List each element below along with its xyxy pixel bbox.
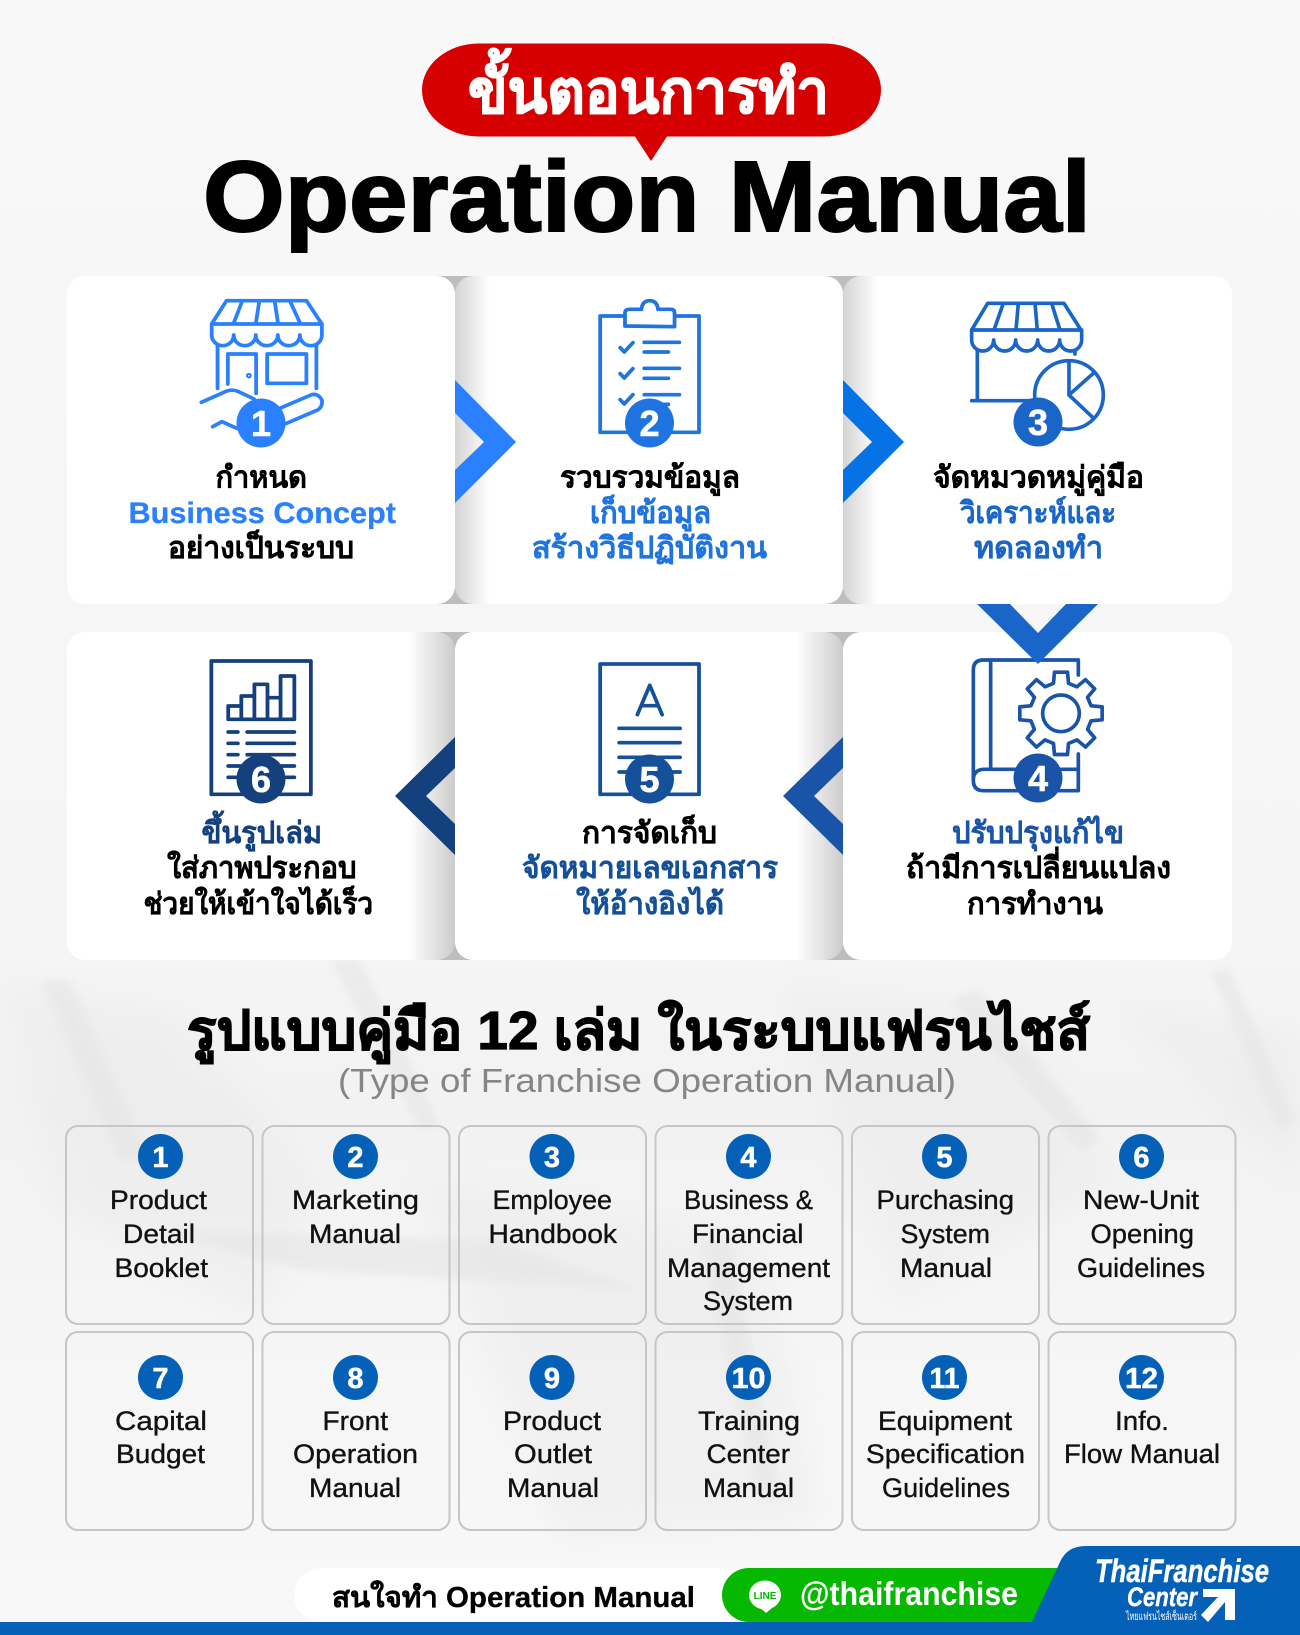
manual 1: Booklet	[114, 1253, 209, 1283]
manual 4: 4	[740, 1142, 757, 1174]
manual 6	[1048, 1126, 1236, 1324]
step 3 text: ทดลองทำ	[974, 532, 1103, 565]
manual 9: Outlet	[514, 1439, 593, 1469]
manual 1	[66, 1126, 253, 1324]
manual 12	[1048, 1332, 1236, 1530]
step 4 text	[906, 815, 1171, 921]
manual 10	[656, 1332, 842, 1530]
step 1 text: อย่างเป็นระบบ	[168, 529, 354, 565]
step 4 card	[843, 632, 1232, 960]
step 6 text: ขึ้นรูปเล่ม	[202, 810, 322, 852]
step 2 text	[532, 462, 767, 565]
line contact pill: @thaifranchise	[800, 1575, 1018, 1612]
manual 7: 7	[152, 1363, 169, 1395]
manual 8	[262, 1332, 450, 1530]
step 6 text: ใส่ภาพประกอบ	[167, 850, 356, 885]
line contact pill	[722, 1568, 1062, 1622]
manual 12: Info.	[1115, 1406, 1169, 1436]
step 5 text: การจัดเก็บ	[582, 814, 717, 850]
step number 2	[625, 398, 674, 448]
manual 7: Budget	[116, 1439, 206, 1469]
manual 5: System	[900, 1219, 990, 1249]
step 4 text: ปรับปรุงแก้ไข	[952, 815, 1124, 852]
panel: manual types grid	[66, 1126, 1236, 1530]
step 3 card	[843, 276, 1232, 604]
manual 8: Manual	[309, 1473, 401, 1503]
manual 10: Training	[698, 1406, 800, 1436]
step 3 text: จัดหมวดหมู่คู่มือ	[933, 462, 1144, 496]
manual 3: Handbook	[488, 1219, 618, 1249]
manual 2	[262, 1126, 450, 1324]
step number 1: 1	[251, 403, 271, 444]
step 4 text: การทำงาน	[967, 888, 1103, 921]
step number 3	[1014, 398, 1062, 446]
manual 4	[656, 1126, 842, 1324]
icon: checklist clipboard	[600, 301, 699, 432]
step number 2: 2	[639, 403, 660, 444]
manual 11: Equipment	[878, 1406, 1013, 1436]
step number 4: 4	[1028, 758, 1048, 799]
step number 6	[236, 754, 286, 804]
step 2 text: สร้างวิธีปฏิบัติงาน	[532, 532, 767, 565]
step 1 text: Business Concept	[128, 497, 396, 530]
manual 8: 8	[347, 1363, 364, 1395]
step 2 text: รวบรวมข้อมูล	[560, 462, 740, 496]
manual 7: Capital	[115, 1406, 207, 1436]
manual 6: 6	[1133, 1142, 1150, 1174]
manual 11	[852, 1332, 1039, 1530]
logo: ThaiFranchise Center: ไทยแฟรนไชส์เซ็นเตอร์	[1125, 1609, 1197, 1623]
manual 12: Flow Manual	[1064, 1439, 1220, 1469]
section subheading: (Type of Franchise Operation Manual)	[338, 1062, 956, 1099]
icon: LINE	[749, 1580, 781, 1613]
main title: Operation Manual	[203, 141, 1091, 253]
logo: ThaiFranchise Center: Center	[1127, 1582, 1198, 1612]
manual 2: Manual	[309, 1219, 401, 1249]
step 1 text: กำหนด	[216, 462, 307, 494]
arrow: step 2 to 3	[843, 380, 904, 503]
step number 5: 5	[639, 759, 660, 800]
manual 1: 1	[152, 1142, 169, 1174]
icon: logo arrow	[1201, 1589, 1235, 1622]
manual 11: Guidelines	[882, 1473, 1010, 1503]
call to action pill	[294, 1568, 745, 1622]
step 6 card	[67, 632, 455, 960]
step number 6: 6	[251, 759, 271, 800]
step number 4	[1014, 754, 1062, 802]
manual 3	[459, 1126, 646, 1324]
manual 9: Product	[503, 1406, 602, 1436]
manual 2: 2	[347, 1142, 364, 1174]
step 4 text: ถ้ามีการเปลี่ยนแปลง	[906, 846, 1171, 885]
manual 4: Management	[667, 1253, 831, 1283]
manual 4: System	[703, 1286, 793, 1316]
manual 4: Business &	[684, 1185, 813, 1215]
manual 5: 5	[936, 1142, 953, 1174]
manual 5: Manual	[900, 1253, 992, 1283]
manual 8: Front	[322, 1406, 389, 1436]
manual 7	[66, 1332, 253, 1530]
manual 10: Manual	[703, 1473, 794, 1503]
panel: process steps top row	[67, 276, 1232, 604]
arrow: step 5 to 6	[395, 737, 455, 855]
manual 6: Opening	[1090, 1219, 1194, 1249]
step 5 text: ให้อ้างอิงได้	[576, 886, 724, 921]
step 5 card	[455, 632, 843, 960]
manual 8: Operation	[293, 1439, 418, 1469]
step 6 text: ช่วยให้เข้าใจได้เร็ว	[144, 885, 373, 921]
arrow: step 1 to 2	[455, 380, 516, 503]
manual 6: New-Unit	[1083, 1185, 1200, 1215]
step 5 text	[522, 814, 778, 921]
manual 3: 3	[544, 1142, 560, 1174]
section heading: รูปแบบคู่มือ 12 เล่ม ในระบบแฟรนไชส์	[187, 999, 1090, 1064]
manual 2: Marketing	[292, 1185, 419, 1215]
manual 10: Center	[706, 1439, 790, 1469]
manual 6: Guidelines	[1077, 1253, 1205, 1283]
icon: document with letter A	[600, 664, 699, 794]
step number 1	[236, 398, 286, 448]
step 5 text: จัดหมายเลขเอกสาร	[522, 852, 778, 885]
icon: report with bar chart	[211, 661, 311, 794]
manual 11: 11	[930, 1363, 960, 1395]
manual 9	[459, 1332, 646, 1530]
step 2 card	[455, 276, 843, 604]
manual 5	[852, 1126, 1039, 1324]
manual 4: Financial	[692, 1219, 804, 1249]
manual 10: 10	[732, 1363, 766, 1395]
speech bubble title	[422, 44, 881, 161]
manual 12: 12	[1125, 1363, 1158, 1395]
step 6 text	[144, 810, 373, 921]
arrow: step 3 to 4	[977, 604, 1098, 664]
icon: book with gear	[973, 660, 1102, 791]
manual 5: Purchasing	[876, 1185, 1014, 1215]
step 3 text: วิเคราะห์และ	[959, 496, 1116, 530]
manual 9: Manual	[507, 1473, 599, 1503]
manual 1: Product	[110, 1185, 208, 1215]
step number 5	[625, 754, 674, 804]
step 2 text: เก็บข้อมูล	[590, 494, 711, 532]
footer	[0, 1546, 1300, 1635]
arrow: step 4 to 5	[783, 737, 843, 855]
speech bubble title: ขั้นตอนการทำ	[468, 48, 829, 126]
step 1 text	[128, 462, 396, 565]
step 3 text	[933, 462, 1144, 565]
manual 9: 9	[544, 1363, 560, 1395]
step number 3: 3	[1028, 402, 1048, 443]
call to action pill: สนใจทำ Operation Manual	[332, 1580, 695, 1614]
icon: LINE: LINE	[754, 1591, 777, 1602]
step 1 card	[67, 276, 455, 604]
section heading	[187, 999, 1090, 1099]
manual 1: Detail	[123, 1219, 195, 1249]
manual 3: Employee	[492, 1185, 612, 1215]
manual 11: Specification	[866, 1439, 1025, 1469]
icon: shop on hand	[201, 301, 322, 428]
panel: process steps bottom row	[67, 632, 1232, 960]
bottom blue band	[0, 1622, 1300, 1635]
icon: shop with pie chart	[972, 303, 1103, 429]
logo: ThaiFranchise Center	[1032, 1546, 1300, 1623]
